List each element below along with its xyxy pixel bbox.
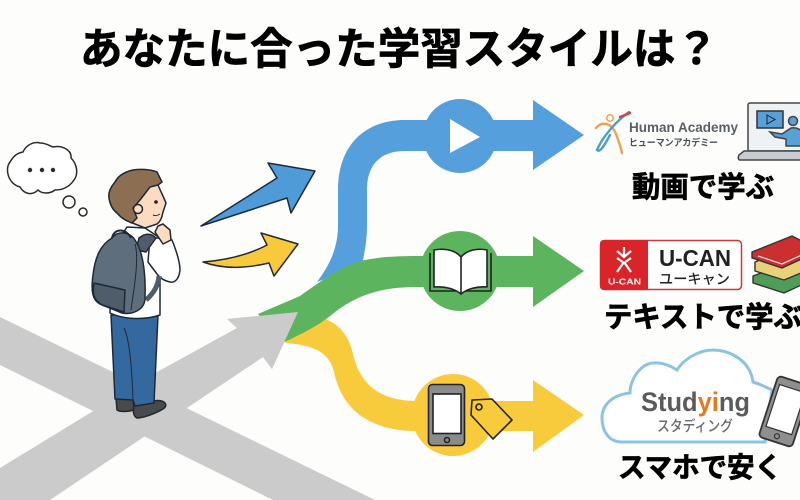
blue route arrow <box>317 99 584 282</box>
icon: U-CAN mark <box>617 247 631 272</box>
logo text: Human Academy <box>629 120 738 136</box>
gray arrow head over routes <box>227 312 298 372</box>
icon: Human Academy logo <box>596 112 630 153</box>
strap <box>136 234 156 252</box>
icon: open book <box>430 249 491 294</box>
brand: U-CAN: ユーキャン <box>659 269 730 289</box>
arm <box>148 237 180 282</box>
brand: U-CAN: U-CAN <box>659 245 731 271</box>
logo text: U-CAN <box>608 276 641 286</box>
hand <box>155 224 171 244</box>
icon: play circle <box>423 99 497 173</box>
person <box>92 169 180 418</box>
icon: stack of books <box>752 236 800 293</box>
backpack <box>92 233 145 313</box>
hair <box>109 169 162 223</box>
icon: laptop <box>738 103 800 160</box>
brand: Studying cloud <box>602 350 772 442</box>
label: smartphone: スマホで安く <box>618 446 782 486</box>
logo text: Studying <box>641 387 750 417</box>
title: あなたに合った学習スタイルは？ <box>80 15 718 77</box>
label: video: 動画で学ぶ <box>632 164 774 206</box>
green route arrow <box>258 231 584 342</box>
crossroads with gray arrow <box>0 312 375 500</box>
icon: price tag <box>471 399 512 439</box>
ear <box>134 204 142 214</box>
trousers <box>111 315 158 406</box>
shirt <box>110 227 160 319</box>
brand: U-CAN <box>600 240 742 290</box>
yellow route arrow <box>285 317 584 456</box>
brand: Human Academy <box>596 103 800 160</box>
icon: phone in cloud <box>758 376 800 447</box>
brand: Human Academy: ヒューマンアカデミー <box>629 135 718 149</box>
small yellow arrow <box>203 233 298 276</box>
thought bubble <box>7 142 87 216</box>
small blue arrow <box>201 163 315 226</box>
brand: Studying cloud: スタディング <box>657 415 733 436</box>
face <box>130 185 166 228</box>
shoes <box>116 398 166 418</box>
icon: smartphone <box>428 384 464 446</box>
